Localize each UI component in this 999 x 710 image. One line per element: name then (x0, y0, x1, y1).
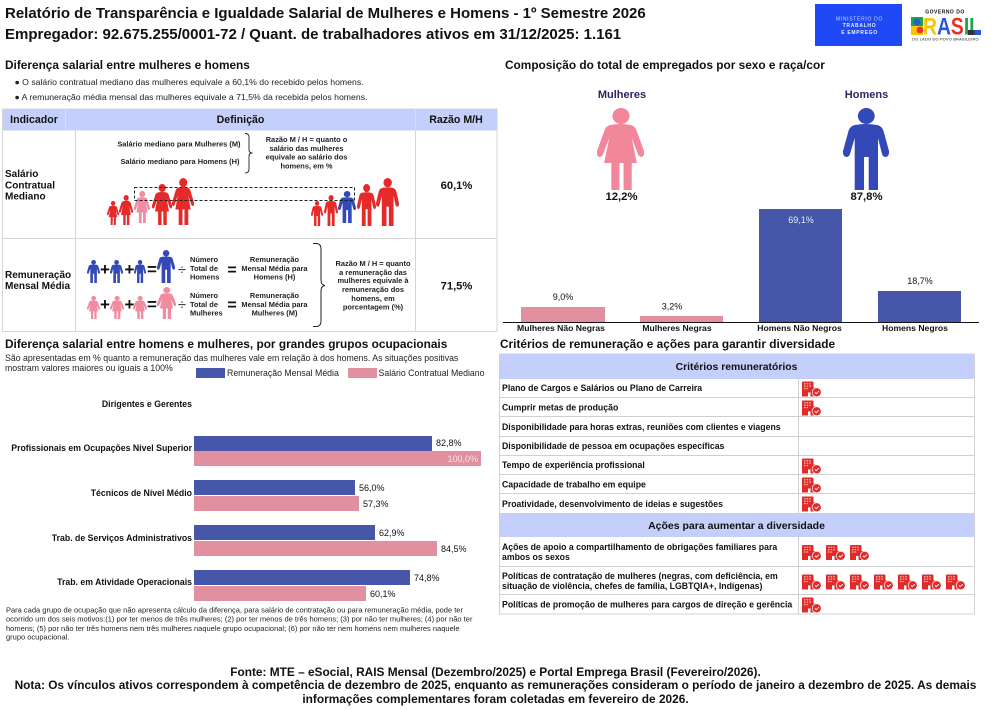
legend (196, 368, 485, 378)
bar chart: grupos ocupacionais: 84,5% (441, 544, 467, 554)
bar chart: grupos ocupacionais: Trab. de Serviços Administrativos (52, 533, 192, 543)
formula: mulheres (87, 287, 308, 319)
formula: mulheres: + (125, 295, 135, 314)
row label: salário contratual mediano: Mediano (5, 192, 46, 202)
formula: homens: Homens (H) (254, 272, 296, 282)
bar chart: grupos ocupacionais: 82,8% (436, 438, 462, 448)
title: Empregador: 92.675.255/0001-72 / Quant. de trabalhadores ativos em 31/12/2025: 1.161 (5, 26, 621, 43)
bar chart: grupos ocupacionais: 62,9% (379, 528, 405, 538)
bar chart: grupos ocupacionais: 100,0% (447, 454, 478, 464)
table header: Indicador (10, 114, 58, 126)
row label: remuneração mensal média (5, 270, 71, 292)
panel: tabela de critérios (500, 354, 974, 614)
brace and ratio explanation (313, 244, 411, 326)
logo: ministério: MINISTÉRIO DO (836, 16, 883, 22)
text block: nota de rodapé do gráfico: grupo ocupacional. (6, 633, 69, 642)
panel: homens composição: Homens (845, 89, 888, 101)
footer: fonte e nota (15, 665, 977, 706)
formula: homens: + (100, 260, 110, 279)
formula: mulheres: = (147, 295, 157, 314)
formula: homens: = (227, 262, 237, 279)
mediana definition text: Salário mediano para Mulheres (M) (117, 140, 241, 148)
row texts: ações (502, 542, 792, 610)
bar chart: grupos ocupacionais: 60,1% (370, 589, 396, 599)
formula: mulheres: + (100, 295, 110, 314)
icons: empresas ações (802, 545, 966, 613)
legend: Remuneração Mensal Média (227, 368, 339, 378)
value: 60,1%: 60,1% (441, 180, 472, 192)
mediana definition text: salário das mulheres (270, 144, 344, 153)
formula: mulheres: Mensal Média para (241, 300, 308, 309)
bar chart: grupos ocupacionais: Trab. em Atividade Operacionais (57, 577, 192, 587)
logo: governo do brasil: GOVERNO DO (925, 10, 965, 16)
bar chart: grupos ocupacionais: 74,8% (414, 573, 440, 583)
text block: explicação: São apresentadas em % quanto a remuneração das mulheres vale em relação à dos homens. As situações positivas (5, 353, 459, 363)
panel: mulheres composição: 12,2% (605, 191, 638, 203)
text block: bullets (14, 77, 367, 102)
bar chart: composição por raça/cor: Mulheres Não Negras (517, 323, 605, 333)
bar chart: composição por raça/cor: 9,0% (553, 292, 573, 302)
value: 71,5%: 71,5% (441, 280, 472, 292)
formula: homens: Mensal Média para (241, 264, 308, 273)
text block: nota de rodapé do gráfico: Para cada grupo de ocupação que não apresenta cálculo da diferença, para salário de contratação ou para remuneração média, pode ter (6, 606, 463, 615)
logo: governo do brasil: RASIL (923, 14, 981, 40)
brace and ratio explanation: mulheres equivale à (337, 276, 409, 285)
bar chart: composição por raça/cor: 69,1% (788, 215, 814, 225)
row texts: critérios: Plano de Cargos e Salários ou Plano de Carreira (502, 383, 702, 393)
mediana definition text: Razão M / H = quanto o (266, 135, 348, 144)
bar chart: composição por raça/cor: Mulheres Negras (642, 323, 712, 333)
heading: diferença salarial: Diferença salarial entre mulheres e homens (5, 58, 250, 72)
bar chart: grupos ocupacionais: Técnicos de Nível Médio (91, 488, 192, 498)
row texts: ações: situação de violência, chefes de família, LGBTQIA+, Indígenas) (502, 581, 763, 591)
title: Relatório de Transparência e Igualdade Salarial de Mulheres e Homens - 1º Semestre 2026 (5, 5, 646, 22)
row texts: critérios: Proatividade, desenvolvimento de ideias e sugestões (502, 499, 723, 509)
row texts: critérios: Disponibilidade de pessoa em ocupações específicas (502, 441, 725, 451)
brace and ratio explanation: homens, em (351, 294, 395, 303)
brace and ratio explanation: a remuneração das (339, 268, 407, 277)
row texts: ações: ambos os sexos (502, 552, 570, 562)
formula: homens: Número (190, 255, 219, 264)
row texts: critérios (502, 383, 781, 509)
formula: mulheres: Mulheres (190, 308, 223, 318)
bar chart: composição por raça/cor: Homens Negros (882, 323, 948, 333)
text block: explicação (5, 353, 459, 373)
formula: homens (87, 250, 308, 283)
text block: nota de rodapé do gráfico: ocorrido um dos seis motivos:(1) por ter menos de três mulheres; (2) por ter menos de três homens; (3) por não ter mulheres; (4) por não ter (6, 615, 473, 624)
panel: tabela de critérios: Critérios remuneratórios (676, 362, 798, 373)
panel: mulheres composição (597, 89, 646, 203)
formula: homens: + (125, 260, 135, 279)
formula: homens: ÷ (178, 262, 186, 278)
bar chart: grupos ocupacionais: 56,0% (359, 483, 385, 493)
formula: homens: = (147, 260, 157, 279)
formula: homens: Remuneração (250, 255, 300, 264)
bar chart: grupos ocupacionais: 57,3% (363, 499, 389, 509)
text block: bullets: ● O salário contratual mediano das mulheres equivale a 60,1% do recebido pelos homens. (14, 77, 364, 87)
icons: empresas critérios (802, 382, 822, 512)
mediana definition text: homens, em % (280, 162, 333, 170)
brace and ratio explanation: porcentagem (%) (343, 302, 404, 312)
icon: man (843, 108, 889, 190)
panel: homens composição: 87,8% (850, 191, 883, 203)
panel: homens composição (843, 89, 889, 203)
logo: governo do brasil (911, 10, 981, 42)
bar chart: composição por raça/cor: 18,7% (907, 276, 933, 286)
bar chart: composição por raça/cor: Homens Não Negros (757, 323, 842, 333)
formula: mulheres: Remuneração (250, 291, 300, 300)
row texts: ações: Políticas de promoção de mulheres para cargos de direção e gerência (502, 600, 792, 610)
row texts: critérios: Tempo de experiência profissional (502, 460, 645, 470)
legend: Salário Contratual Mediano (378, 368, 485, 378)
brace and ratio explanation: remuneração dos (342, 285, 404, 294)
logo: governo do brasil: DO LADO DO POVO BRASILEIRO (912, 36, 979, 42)
formula: mulheres: Total de (190, 300, 218, 309)
bar chart: composição por raça/cor (503, 209, 979, 333)
logo: ministério (815, 4, 902, 46)
footer: fonte e nota: Nota: Os vínculos ativos correspondem à competência de dezembro de 2025, enquanto as remunerações consideram o período de janeiro a dezembro de 2025. As demais (15, 678, 977, 692)
row texts: ações: Políticas de contratação de mulheres (negras, com deficiência, em (502, 571, 778, 581)
bar chart: grupos ocupacionais: Dirigentes e Gerentes (102, 399, 192, 409)
brace and ratio explanation: Razão M / H = quanto (336, 259, 411, 268)
icons: homens ordenados (311, 178, 399, 226)
panel: mulheres composição: Mulheres (598, 89, 646, 101)
footer: fonte e nota: informações complementares foram coletadas em fevereiro de 2026. (302, 692, 689, 706)
table header (3, 109, 497, 130)
table header: Definição (217, 114, 265, 126)
text block: nota de rodapé do gráfico (6, 606, 473, 642)
formula: mulheres: = (227, 297, 237, 314)
row label: remuneração mensal média: Remuneração (5, 270, 71, 281)
formula: mulheres: Número (190, 291, 219, 300)
table header: Razão M/H (429, 114, 483, 126)
row texts: critérios: Capacidade de trabalho em equipe (502, 480, 646, 490)
bar chart: grupos ocupacionais (11, 399, 481, 601)
row label: salário contratual mediano: Contratual (5, 180, 55, 192)
mediana definition text (117, 134, 348, 173)
logo: ministério: TRABALHO (843, 23, 876, 29)
heading: composição: Composição do total de empregados por sexo e raça/cor (505, 58, 825, 72)
row label: salário contratual mediano (5, 169, 55, 202)
formula: mulheres: ÷ (178, 296, 186, 314)
text block: nota de rodapé do gráfico: homens; (5) por não ter três homens nem três mulheres naquele grupo ocupacional; (6) por não ter nem homens nem mulheres naquele (6, 624, 460, 633)
bar chart: grupos ocupacionais: Profissionais em Ocupações Nível Superior (11, 443, 193, 453)
formula: mulheres: Mulheres (M) (252, 308, 298, 318)
icons: mulheres ordenadas (107, 178, 194, 225)
row texts: ações: Ações de apoio a compartilhamento de obrigações familiares para (502, 542, 777, 552)
bar chart: composição por raça/cor: 3,2% (662, 302, 682, 312)
row label: salário contratual mediano: Salário (5, 169, 38, 180)
row texts: critérios: Disponibilidade para horas extras, reuniões com clientes e viagens (502, 422, 781, 432)
row texts: critérios: Cumprir metas de produção (502, 402, 618, 412)
formula: homens: Total de (190, 264, 218, 273)
mediana definition text: equivale ao salário dos (266, 152, 347, 162)
row label: remuneração mensal média: Mensal Média (5, 281, 70, 292)
title (5, 5, 646, 43)
footer: fonte e nota: Fonte: MTE – eSocial, RAIS Mensal (Dezembro/2025) e Portal Emprega Brasil (Fevereiro/2026). (230, 665, 761, 679)
heading: critérios: Critérios de remuneração e ações para garantir diversidade (500, 337, 835, 351)
text block: bullets: ● A remuneração média mensal das mulheres equivale a 71,5% da recebida pelos homens. (14, 92, 367, 102)
logo: ministério: E EMPREGO (841, 30, 878, 36)
formula: homens: Homens (190, 272, 219, 282)
icon: woman (597, 108, 644, 190)
mediana definition text: Salário mediano para Homens (H) (120, 157, 240, 166)
heading: diferença por grupos: Diferença salarial entre homens e mulheres, por grandes grupos ocupacionais (5, 337, 448, 351)
text block: explicação: mostram valores maiores ou iguais a 100% (5, 363, 173, 373)
panel: tabela de definição (2, 109, 497, 332)
panel: tabela de critérios: Ações para aumentar a diversidade (648, 520, 825, 532)
